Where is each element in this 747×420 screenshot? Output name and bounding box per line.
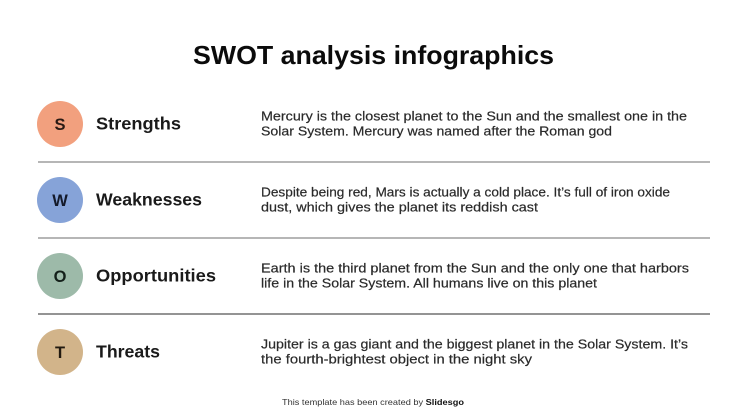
text: weaknesses description <box>261 184 670 214</box>
text: strengths description <box>261 108 687 138</box>
heading: strengths: Strengths <box>96 114 181 134</box>
row: weaknesses <box>37 177 670 223</box>
text: weaknesses description: dust, which gives the planet its reddish cast <box>261 200 538 214</box>
text: opportunities description: life in the Solar System. All humans live on this planet <box>261 276 597 290</box>
icon: W circle: W <box>52 192 68 210</box>
heading: threats: Threats <box>96 342 160 362</box>
icon: W circle <box>37 177 83 223</box>
row: threats <box>37 329 689 375</box>
icon: O circle: O <box>54 268 67 286</box>
text: opportunities description: Earth is the third planet from the Sun and the only one that harbors <box>261 260 690 276</box>
heading: opportunities: Opportunities <box>96 266 216 286</box>
text: threats description <box>261 336 689 366</box>
icon: S circle: S <box>54 116 66 134</box>
text: strengths description: Solar System. Mercury was named after the Roman god <box>261 124 612 138</box>
icon: T circle <box>37 329 83 375</box>
title: SWOT analysis infographics <box>193 40 554 70</box>
row: opportunities <box>37 253 690 299</box>
text: opportunities description <box>261 260 690 290</box>
text: weaknesses description: Despite being red, Mars is actually a cold place. It’s full of iron oxide <box>261 184 670 200</box>
row: strengths <box>37 101 687 147</box>
icon: S circle <box>37 101 83 147</box>
footer credit: This template has been created by Slidesgo <box>282 397 464 407</box>
icon: T circle: T <box>55 344 65 362</box>
text: strengths description: Mercury is the closest planet to the Sun and the smallest one in the <box>261 108 687 124</box>
icon: O circle <box>37 253 83 299</box>
heading: weaknesses: Weaknesses <box>96 190 202 210</box>
text: threats description: the fourth-brightest object in the night sky <box>261 352 533 366</box>
text: threats description: Jupiter is a gas giant and the biggest planet in the Solar System. It’s <box>261 336 689 352</box>
